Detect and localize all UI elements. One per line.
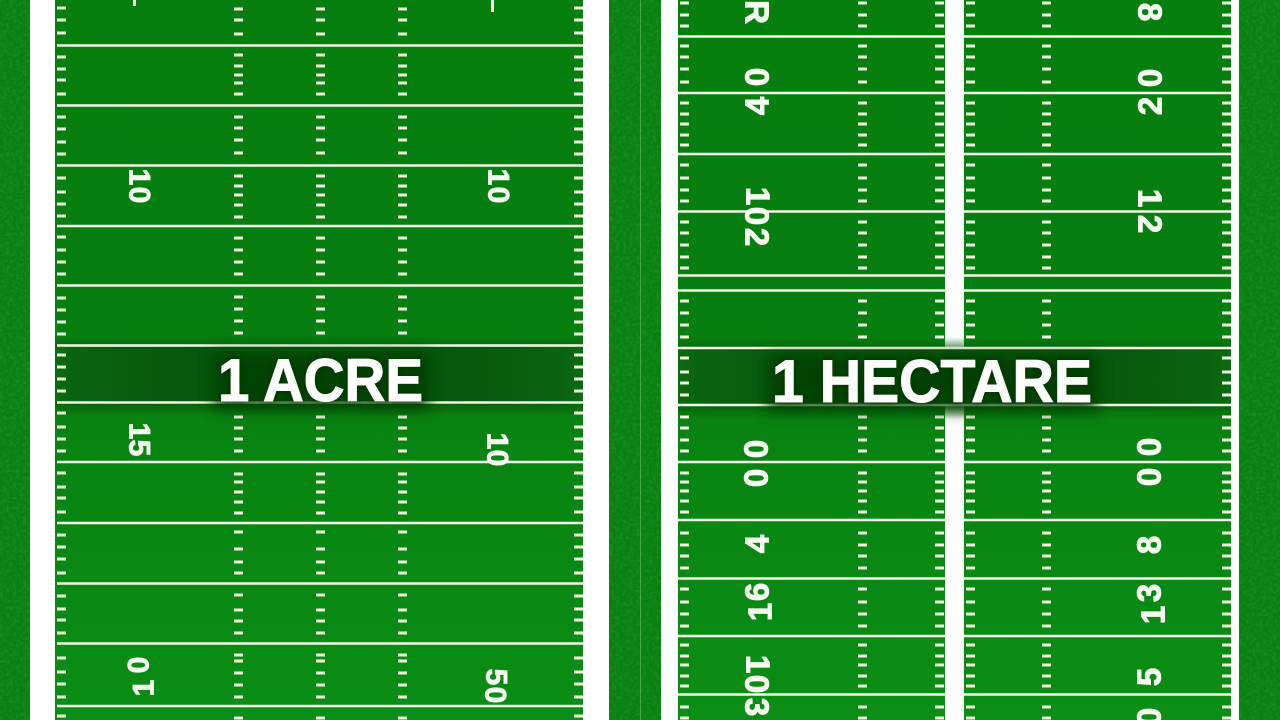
hectare yard numbers: 2 — [1132, 215, 1168, 233]
hectare yard numbers — [738, 0, 1172, 720]
hectare hash marks — [680, 3, 1231, 718]
acre yard numbers: 1 — [482, 169, 514, 185]
acre field grass — [55, 0, 583, 720]
hectare yard numbers: 0 — [738, 68, 776, 86]
hectare field grass left half — [678, 0, 945, 720]
acre field surface — [30, 0, 609, 720]
hectare yard numbers: 1 — [1132, 189, 1168, 207]
label: 1 hectare — [766, 348, 1098, 415]
acre label band — [55, 335, 583, 417]
acre yard numbers: 0 — [482, 187, 514, 203]
acre yard numbers: 0 — [480, 450, 514, 466]
hectare yard numbers: 0 — [738, 207, 776, 225]
panel: 1 hectare field — [661, 0, 1239, 720]
hectare yard numbers: R — [738, 0, 776, 24]
acre yard numbers: 0 — [122, 657, 156, 673]
hectare field surface — [661, 0, 1239, 720]
hectare yard numbers: 0 — [738, 675, 776, 693]
acre yard numbers: 0 — [478, 687, 512, 703]
title: 1 hectare: 1 HECTARE — [772, 348, 1092, 415]
shadow behind acre label — [212, 352, 430, 410]
hectare yard numbers: 4 — [738, 96, 776, 115]
acre yard numbers: 1 — [122, 169, 156, 185]
acre yard numbers: 5 — [122, 440, 156, 456]
hectare yard numbers: 8 — [1132, 3, 1168, 21]
hectare yard numbers: 0 — [1130, 438, 1168, 456]
acre yard numbers: 1 — [122, 423, 156, 439]
hectare yard lines — [678, 36, 1231, 694]
acre yard numbers: 5 — [480, 669, 512, 685]
acre yard numbers: 1 — [128, 680, 160, 696]
hectare yard numbers: 0 — [1130, 468, 1168, 486]
label: 1 acre — [212, 347, 430, 414]
hectare yard numbers: 2 — [738, 228, 776, 246]
hectare yard numbers: 3 — [1130, 584, 1168, 602]
hectare yard numbers: 2 — [1132, 97, 1168, 115]
hectare yard numbers: 1 — [1134, 606, 1172, 624]
acre yard lines — [57, 46, 584, 706]
acre yard numbers: 1 — [480, 433, 514, 449]
hectare field grass right half — [964, 0, 1231, 720]
hectare label band — [678, 337, 1231, 419]
acre hash marks — [57, 8, 583, 718]
panel: 1 acre field — [30, 0, 609, 720]
hectare yard numbers: 5 — [1130, 668, 1168, 686]
acre yard numbers — [122, 0, 514, 703]
hectare yard numbers: 1 — [740, 187, 776, 205]
hectare yard numbers: 0 — [738, 440, 774, 458]
acre yard numbers: 0 — [122, 187, 156, 203]
hectare yard numbers: 4 — [738, 534, 776, 553]
hectare yard numbers: 0 — [1132, 69, 1168, 87]
hectare yard numbers: 8 — [1130, 536, 1168, 554]
hectare yard numbers: 6 — [738, 583, 776, 601]
hectare yard numbers: 1 — [740, 655, 776, 673]
hectare yard numbers: 0 — [738, 469, 774, 487]
shadow behind hectare label — [766, 354, 1098, 412]
hectare yard numbers: 1 — [742, 603, 778, 621]
title: 1 acre: 1 ACRE — [218, 347, 423, 414]
hectare yard numbers: 3 — [738, 698, 776, 716]
